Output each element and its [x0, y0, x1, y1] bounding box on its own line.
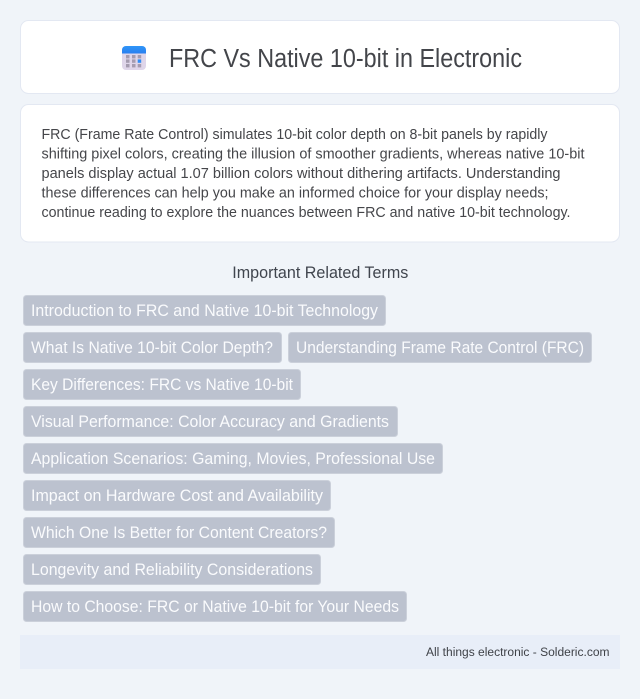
term chip: Introduction to FRC and Native 10-bit Technology — [31, 301, 379, 320]
term chip: Key Differences: FRC vs Native 10-bit — [31, 375, 293, 394]
term chip — [24, 518, 334, 548]
term list — [24, 296, 592, 622]
term chip: Impact on Hardware Cost and Availability — [31, 486, 324, 505]
text block: intro: shifting pixel colors, creating the illusion of smoother gradients, whereas native 10-bit — [42, 146, 584, 162]
text block: intro — [42, 127, 584, 221]
term chip: Visual Performance: Color Accuracy and Gradients — [31, 412, 389, 431]
term chip: Understanding Frame Rate Control (FRC) — [296, 338, 584, 357]
term chip — [24, 370, 300, 400]
term chip: What Is Native 10-bit Color Depth? — [31, 338, 273, 357]
footer credit: All things electronic - Solderic.com — [426, 645, 610, 659]
term chip: Which One Is Better for Content Creators? — [31, 523, 327, 542]
text block: intro: FRC (Frame Rate Control) simulates 10-bit color depth on 8-bit panels by rapidly — [42, 127, 548, 143]
icon: calendar — [122, 46, 146, 70]
term chip — [24, 296, 386, 326]
term chip: How to Choose: FRC or Native 10-bit for Your Needs — [31, 597, 399, 616]
panel: intro paragraph — [20, 104, 620, 242]
term chip: Application Scenarios: Gaming, Movies, Professional Use — [31, 449, 435, 468]
term chip — [24, 480, 330, 510]
term chip — [288, 332, 592, 362]
term chip — [24, 444, 442, 474]
text block: intro: these differences can help you make an informed choice for your display needs; — [42, 186, 548, 202]
term chip — [24, 592, 406, 622]
term chip — [24, 554, 320, 584]
term chip — [24, 332, 282, 362]
heading: related terms: Important Related Terms — [232, 264, 408, 282]
text block: intro: continue reading to explore the nuances between FRC and native 10-bit technology. — [42, 205, 570, 221]
text block: intro: panels display actual 1.07 billion colors without dithering artifacts. Understanding — [42, 166, 560, 182]
term chip: Longevity and Reliability Considerations — [31, 560, 313, 579]
header panel — [20, 20, 620, 94]
title: FRC Vs Native 10-bit in Electronic — [169, 45, 522, 73]
term chip — [24, 406, 398, 436]
footer — [20, 635, 620, 669]
